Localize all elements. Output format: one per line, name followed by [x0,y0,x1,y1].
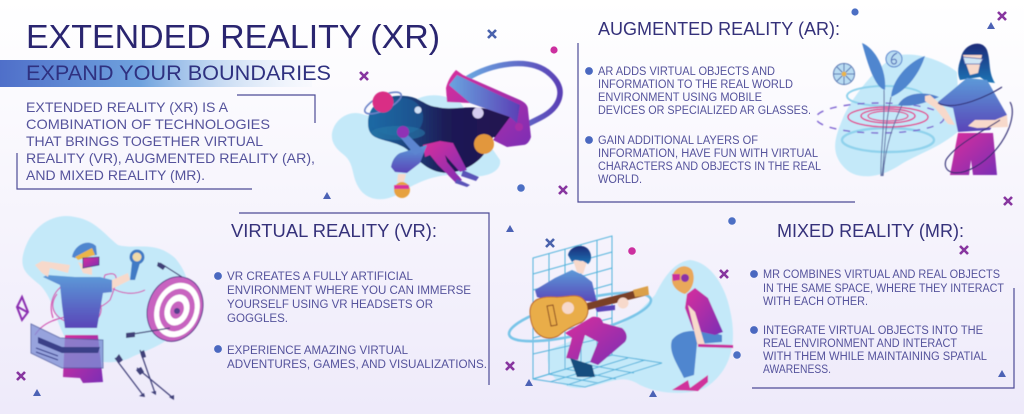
bullet list: augmented reality: INFORMATION TO THE REAL WORLD [598,77,793,91]
intro text block: THAT BRINGS TOGETHER VIRTUAL [26,133,263,149]
controller [130,262,140,280]
bullet list: mixed reality: AWARENESS. [763,362,831,376]
intro text block: EXTENDED REALITY (XR) IS A [26,99,229,115]
panel: extended reality intro [0,18,440,189]
bullet list: augmented reality: DEVICES OR SPECIALIZED AR GLASSES. [598,103,811,117]
bullet list: mixed reality: WITH EACH OTHER. [763,294,868,308]
heading: augmented reality: AUGMENTED REALITY (AR): [598,18,840,39]
headset frame [446,70,531,147]
bullet list: mixed reality: REAL ENVIRONMENT AND INTERACT [763,336,957,350]
seated woman [671,331,722,378]
bullet list: virtual reality: VR CREATES A FULLY ARTIFICIAL [227,269,413,283]
headset strap [468,64,560,127]
title: EXTENDED REALITY (XR) [26,18,440,55]
light ring [505,283,655,351]
space blob [368,96,512,173]
bullet list: mixed reality: MR COMBINES VIRTUAL AND REAL OBJECTS [763,267,1000,281]
bullet list: virtual reality: EXPERIENCE AMAZING VIRTUAL [227,343,408,357]
woman figure [950,133,997,175]
heading: mixed reality: MIXED REALITY (MR): [777,220,964,241]
bullet list: augmented reality: INFORMATION, HAVE FUN WITH VIRTUAL [598,146,818,160]
bullet list: augmented reality [585,64,821,186]
bullet list: virtual reality [214,269,487,371]
bullet list: virtual reality: ENVIRONMENT WHERE YOU CAN IMMERSE [227,283,471,297]
intro text block: REALITY (VR), AUGMENTED REALITY (AR), [26,150,315,166]
bullet list: augmented reality: CHARACTERS AND OBJECTS IN THE REAL [598,159,821,173]
guitarist [565,317,627,365]
bullet list: mixed reality: INTEGRATE VIRTUAL OBJECTS INTO THE [763,323,983,337]
intro text block [26,99,315,183]
bullet list: virtual reality: ADVENTURES, GAMES, AND VISUALIZATIONS. [227,357,487,371]
panel: virtual reality [214,213,489,385]
illustration: man with VR headset and target [17,216,212,400]
bullet list: mixed reality: WITH THEM WHILE MAINTAINING SPATIAL [763,349,987,363]
icons in the air [834,64,854,84]
illustration: woman with AR glasses [816,43,1012,176]
bullet list: virtual reality: GOGGLES. [227,311,288,325]
man figure [63,335,103,383]
intro text block: AND MIXED REALITY (MR). [26,167,205,183]
bullet list: virtual reality: YOURSELF USING VR HEADSETS OR [227,297,433,311]
bullet list: augmented reality: GAIN ADDITIONAL LAYERS OF [598,133,758,147]
subtitle: EXPAND YOUR BOUNDARIES [26,61,331,85]
panel: mixed reality [750,220,1014,388]
target [138,268,212,350]
panel: augmented reality [578,18,855,202]
arrows [115,263,182,398]
bow icon [17,297,28,320]
bullet list: augmented reality: ENVIRONMENT USING MOBILE [598,90,762,104]
illustration: floating person and VR headset [332,64,560,199]
floating person [423,141,467,183]
planets [362,88,404,118]
wireframe grid [533,236,662,387]
bullet list: augmented reality: AR ADDS VIRTUAL OBJECTS AND [598,64,775,78]
heading: virtual reality: VIRTUAL REALITY (VR): [231,220,437,241]
subtitle band [0,60,312,87]
plant leaves [881,90,902,176]
holographic screen [31,324,103,368]
intro text block: COMBINATION OF TECHNOLOGIES [26,116,270,132]
illustration: guitarist and seated woman [505,236,733,393]
bullet list: mixed reality [750,267,1004,376]
bullet list: augmented reality: WORLD. [598,172,642,186]
